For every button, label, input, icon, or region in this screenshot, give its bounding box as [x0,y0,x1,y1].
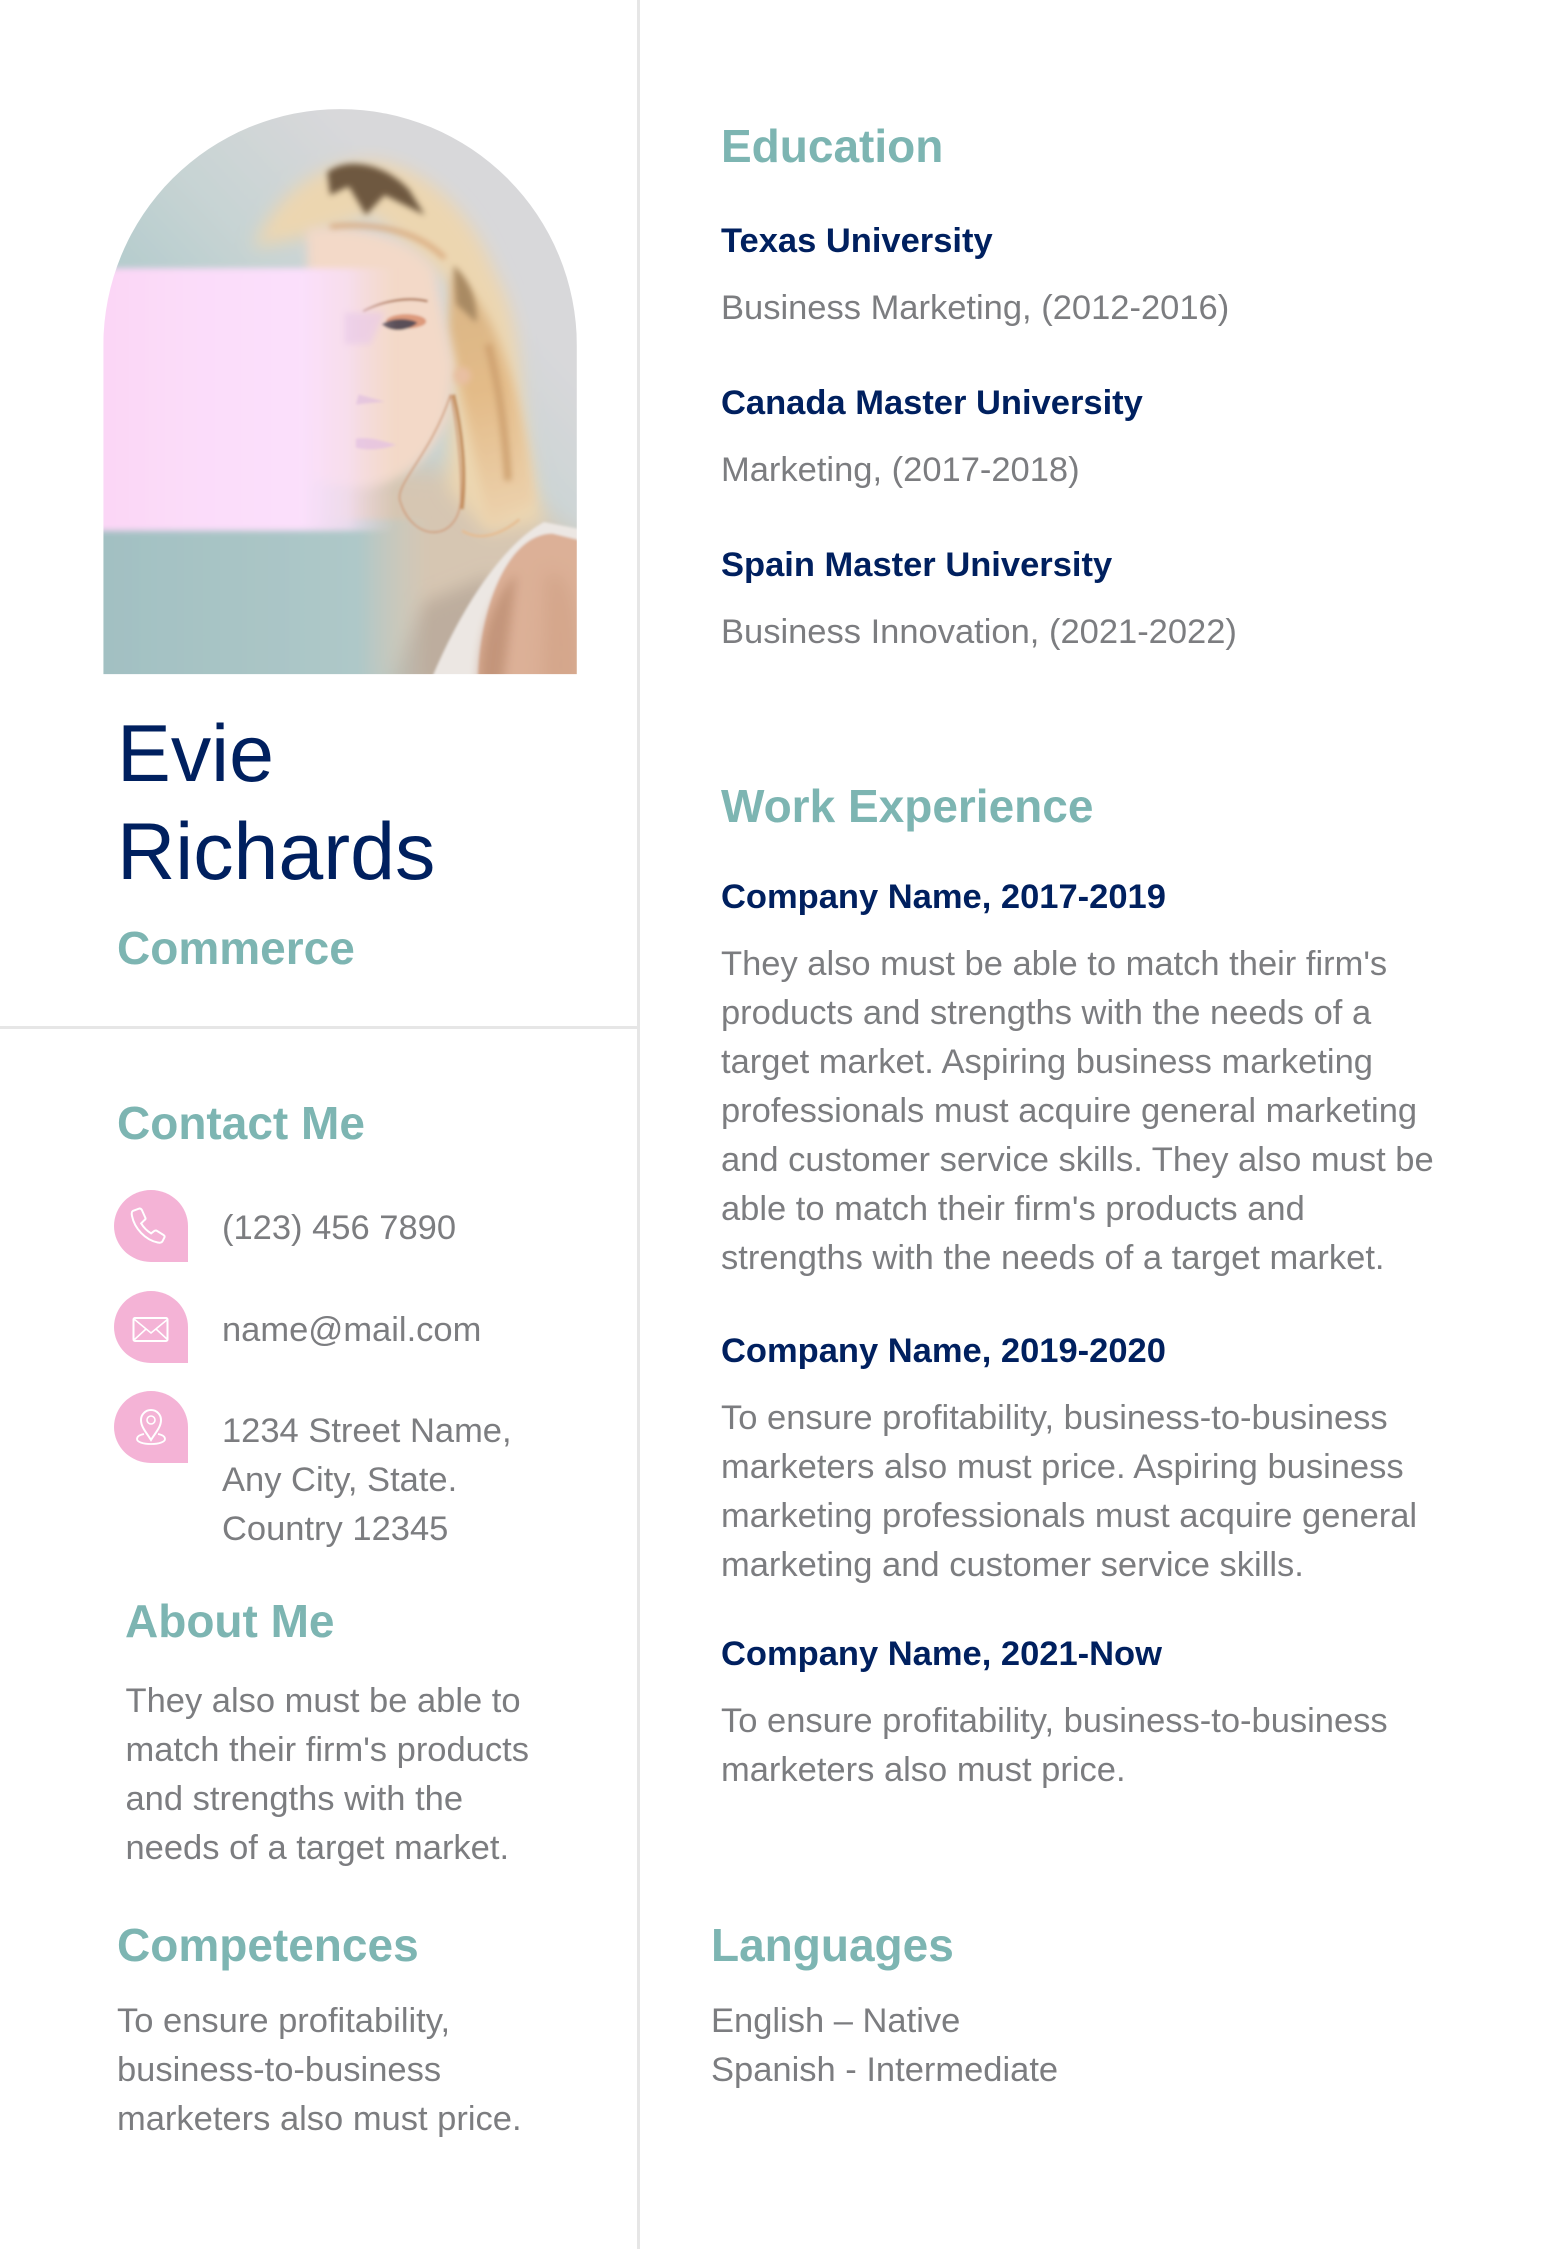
job 2: To ensure profitability, business-to-business [721,1399,1388,1437]
contact: address: Any City, State. [222,1461,457,1499]
languages list: English – Native [711,2002,960,2040]
about me text: needs of a target market. [126,1829,509,1867]
name [117,709,435,897]
heading: competences: Competences [117,1919,419,1971]
name: Richards [117,807,435,897]
icon: phone [114,1190,188,1262]
job 1: products and strengths with the needs of a [721,994,1372,1032]
competences text [117,2002,522,2138]
education entry 3: Spain Master University [721,546,1112,584]
job title: Commerce [117,922,355,974]
heading: work experience: Work Experience [721,780,1093,832]
heading: education: Education [721,120,943,172]
contact: address [222,1412,512,1548]
about me text: and strengths with the [126,1780,463,1818]
header divider [0,1026,637,1029]
about me text [126,1682,529,1867]
heading: languages: Languages [711,1919,954,1971]
job 1: able to match their firm's products and [721,1190,1305,1228]
contact: email: name@mail.com [222,1311,481,1349]
contact: phone: (123) 456 7890 [222,1209,456,1247]
job 3: To ensure profitability, business-to-business [721,1702,1388,1740]
education entry 3 [721,546,1237,651]
about me text: match their firm's products [126,1731,529,1769]
job 2: marketing professionals must acquire general [721,1497,1417,1535]
education entry 2: Canada Master University [721,384,1143,422]
education entry 2: Marketing, (2017-2018) [721,451,1080,489]
job 3 [721,1635,1388,1789]
competences text: To ensure profitability, [117,2002,450,2040]
heading: contact me: Contact Me [117,1097,365,1149]
job 3: marketers also must price. [721,1751,1126,1789]
education entry 1: Texas University [721,222,993,260]
job 1: They also must be able to match their firm's [721,945,1387,983]
job 1: Company Name, 2017-2019 [721,878,1166,916]
about me text: They also must be able to [126,1682,521,1720]
competences text: business-to-business [117,2051,441,2089]
column divider [637,0,640,2249]
job 3: Company Name, 2021-Now [721,1635,1162,1673]
competences text: marketers also must price. [117,2100,522,2138]
job 1: professionals must acquire general marketing [721,1092,1417,1130]
education entry 1: Business Marketing, (2012-2016) [721,289,1229,327]
job 1 [721,878,1434,1277]
name: Evie [117,709,274,799]
job 1: and customer service skills. They also must be [721,1141,1434,1179]
languages list [711,2002,1058,2089]
languages list: Spanish - Intermediate [711,2051,1058,2089]
icon: location [114,1391,188,1463]
icon: email [114,1291,188,1363]
job 2 [721,1332,1417,1584]
heading: about me: About Me [125,1595,335,1647]
contact: address: Country 12345 [222,1510,448,1548]
job 2: Company Name, 2019-2020 [721,1332,1166,1370]
contact: address: 1234 Street Name, [222,1412,512,1450]
job 2: marketing and customer service skills. [721,1546,1304,1584]
job 2: marketers also must price. Aspiring business [721,1448,1404,1486]
education entry 3: Business Innovation, (2021-2022) [721,613,1237,651]
job 1: target market. Aspiring business marketing [721,1043,1373,1081]
education entry 1 [721,222,1229,327]
job 1: strengths with the needs of a target market. [721,1239,1385,1277]
profile photo [103,109,577,674]
education entry 2 [721,384,1143,489]
